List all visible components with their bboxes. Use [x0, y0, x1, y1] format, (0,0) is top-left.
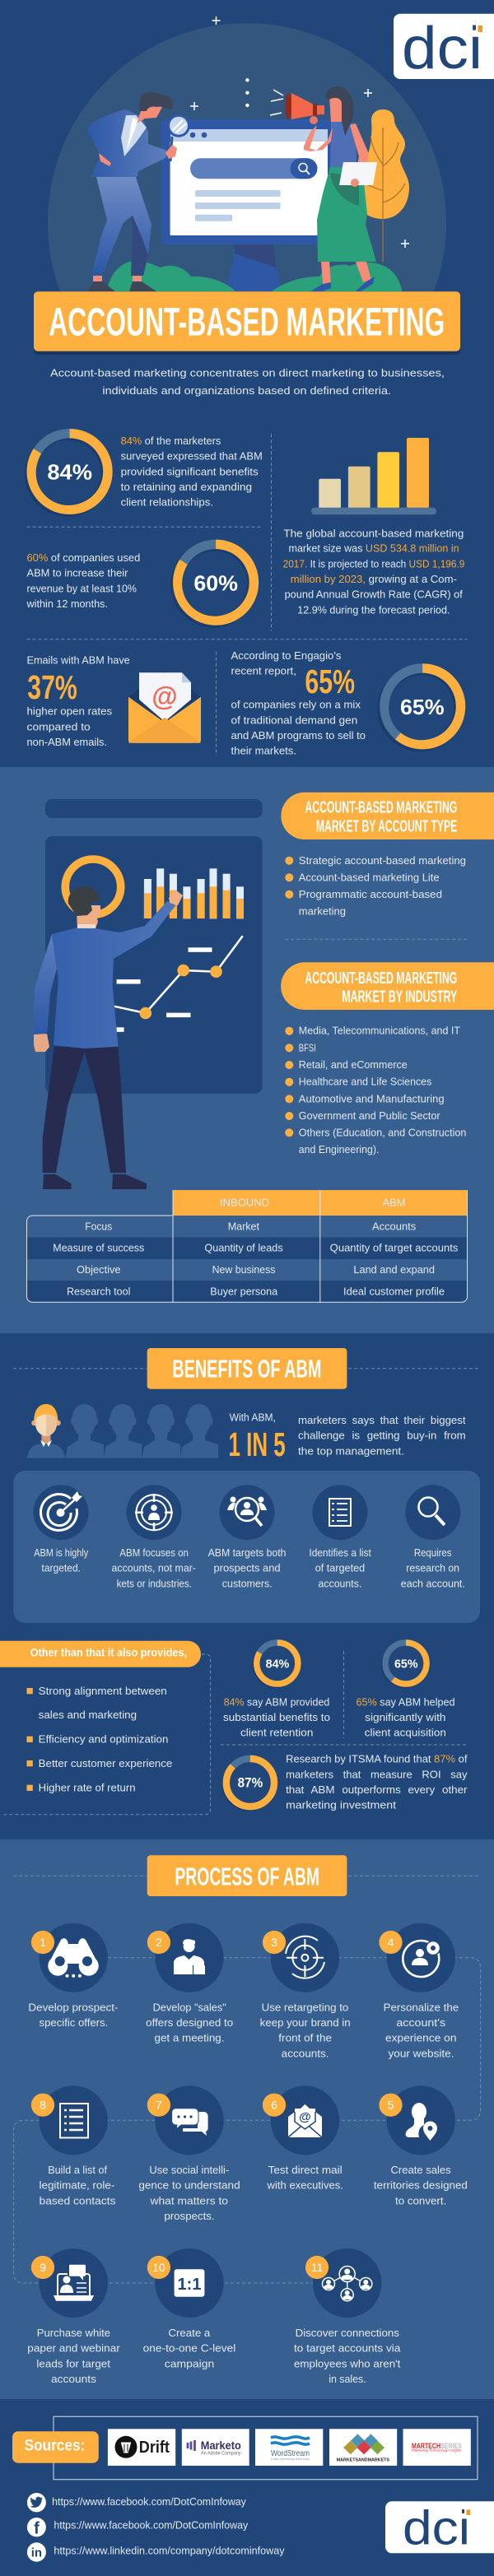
section background: market — [0, 767, 494, 1333]
step 2: Develop "sales" — [153, 2001, 226, 2013]
step 4: account's — [396, 2016, 446, 2029]
panel: sources — [12, 2416, 478, 2480]
benefit: research: Requires — [414, 1546, 452, 1559]
text: Engagio 65%: their markets. — [231, 745, 296, 757]
step 3: accounts. — [282, 2047, 329, 2059]
text: market size: market size was USD 534.8 million in — [288, 542, 459, 555]
bushes — [107, 261, 402, 291]
man pointing at board — [34, 886, 183, 1189]
section background: process — [0, 1839, 494, 2399]
social: facebook — [27, 2518, 249, 2538]
step 9: accounts — [51, 2373, 97, 2385]
list: industries: Government and Public Sector — [299, 1109, 440, 1122]
list: industries: Media, Telecommunications, and IT — [299, 1025, 460, 1037]
logo: MarTech Series: MARTECHSERIES — [412, 2442, 462, 2450]
step 2 — [146, 1923, 233, 2044]
hero illustration — [48, 16, 446, 291]
sources tag — [12, 2431, 99, 2463]
highlighted person — [31, 1404, 61, 1447]
text: 60% of companies — [26, 551, 140, 610]
donut: small 65%: 65% — [394, 1657, 418, 1671]
donut: 65% — [377, 666, 463, 751]
step 1: specific offers. — [40, 2016, 108, 2029]
callout: other than that: Other than that it also provides, — [30, 1646, 187, 1659]
step 7: gence to understand — [138, 2179, 240, 2192]
table rows: Focus — [85, 1220, 113, 1232]
title banner — [34, 291, 460, 355]
benefit: list: of targeted — [315, 1562, 365, 1574]
board ring — [65, 859, 121, 914]
benefit: highly targeted: targeted. — [41, 1562, 81, 1574]
text: ITSMA research — [286, 1753, 468, 1811]
list: industries: BFSI — [299, 1041, 316, 1053]
step 6: Test direct mail — [268, 2164, 343, 2176]
text: 65% client acquisition: significantly with — [365, 1711, 446, 1723]
step 3: Use retargeting to — [262, 2001, 348, 2013]
list: account types: Strategic account-based marketing — [299, 854, 466, 867]
intro text: individuals and organizations based on defined criteria. — [102, 384, 391, 397]
text: market size: 12.9% during the forecast period. — [297, 603, 450, 616]
heading: benefits of ABM: BENEFITS OF ABM — [172, 1354, 321, 1383]
donut: 84% — [25, 431, 110, 517]
step 5: 5 — [388, 2099, 394, 2112]
text: market size: pound Annual Growth Rate (CAGR) of — [285, 588, 463, 601]
logo: WordStream: Online Advertising Made Easy — [271, 2457, 310, 2461]
text: Engagio 65%: of traditional demand gen — [231, 714, 357, 726]
text: 65% client acquisition — [356, 1695, 455, 1739]
list: also provides: sales and marketing — [39, 1709, 137, 1721]
list: account types: marketing — [299, 905, 346, 918]
step 10: one-to-one C-level — [143, 2342, 235, 2355]
donut: small 84% — [253, 1641, 300, 1688]
step 11 — [294, 2248, 401, 2385]
logo: Drift — [108, 2429, 175, 2466]
table rows: Land and expand — [353, 1263, 435, 1276]
text: 84% client retention — [223, 1695, 330, 1739]
text: 84% of marketers: 84% of the marketers — [121, 435, 221, 447]
step 11: 11 — [311, 2261, 323, 2274]
step 11: in sales. — [329, 2373, 366, 2385]
step 1: 1 — [40, 1936, 46, 1949]
step 11: employees who aren't — [294, 2357, 401, 2369]
benefit: accounts: accounts, not mar- — [112, 1562, 196, 1574]
logo: WordStream: WordStream — [271, 2448, 310, 2458]
benefit: research: research on — [406, 1562, 459, 1574]
callout: other than that — [0, 1641, 201, 1667]
social: facebook: f — [34, 2520, 40, 2538]
text: 65% client acquisition: 65% say ABM helped — [356, 1695, 455, 1708]
table rows: New business — [212, 1263, 276, 1276]
table rows: Accounts — [372, 1220, 417, 1232]
step 4: your website. — [389, 2047, 454, 2059]
text: market size: 2017. It is projected to reach USD 1,196.9 — [283, 557, 464, 570]
social: twitter: https://www.facebook.com/DotComInfoway — [52, 2495, 246, 2508]
benefit: highly targeted — [33, 1485, 89, 1574]
logo: MarTech Series — [403, 2429, 471, 2466]
ribbon: by industry — [281, 962, 494, 1010]
benefit: list: accounts. — [318, 1577, 361, 1589]
text: 84% of marketers: surveyed expressed that ABM — [121, 450, 263, 463]
step 2: get a meeting. — [155, 2032, 224, 2044]
step 10: Create a — [168, 2327, 211, 2339]
step 9: Purchase white — [37, 2327, 110, 2339]
benefit: research — [401, 1485, 465, 1589]
donut: 84%: 84% — [47, 460, 92, 485]
social: twitter — [27, 2493, 246, 2512]
table rows: Quantity of leads — [204, 1242, 283, 1254]
step 5: Create sales — [390, 2164, 451, 2176]
step 8: based contacts — [40, 2194, 116, 2206]
text: Engagio 65%: 65% — [305, 663, 355, 700]
list: account types: Account-based marketing Lite — [299, 872, 440, 884]
step 10 — [143, 2248, 235, 2369]
intro text: Account-based marketing concentrates on direct marketing to businesses, — [50, 367, 445, 379]
logo: Drift: Drift — [139, 2439, 170, 2457]
intro text — [50, 367, 445, 397]
table rows: Ideal customer profile — [343, 1285, 445, 1297]
social: linkedin: https://www.linkedin.com/company/dotcominfoway — [54, 2544, 285, 2556]
step 10: 10 — [152, 2261, 165, 2274]
text: emails 37%: higher open rates — [26, 705, 113, 718]
text: 84% client retention: client retention — [240, 1727, 313, 1739]
stat: 1 in 5: challenge is getting buy-in from — [298, 1430, 466, 1442]
step 9: paper and webinar — [27, 2342, 120, 2355]
step 9 — [27, 2248, 120, 2385]
table rows: Market — [228, 1220, 259, 1232]
logo: dci bottom: dci — [403, 2502, 470, 2555]
step 2: 2 — [156, 1936, 162, 1949]
step 4: experience on — [385, 2032, 456, 2044]
man with magnifier — [86, 91, 190, 291]
section background: footer — [0, 2399, 494, 2576]
text: 84% of marketers: provided significant benefits — [121, 465, 259, 477]
step 8: Build a list of — [48, 2164, 107, 2176]
step 1: Develop prospect- — [28, 2001, 119, 2013]
logo: dci top: dci — [402, 16, 482, 81]
step 4: 4 — [388, 1936, 394, 1949]
icon: envelope: @ — [151, 681, 178, 711]
icon: envelope — [128, 671, 201, 743]
donut: small 84%: 84% — [266, 1657, 289, 1671]
process connector — [13, 1958, 481, 2283]
text: 84% of marketers: to retaining and expanding — [121, 481, 252, 493]
list: also provides: Strong alignment between — [39, 1685, 167, 1697]
monitor stand — [226, 244, 282, 291]
icon row: 1 in 5 people — [26, 1404, 218, 1458]
stat: 1 in 5: marketers says that their biggest — [298, 1414, 466, 1426]
benefit: prospects: prospects and — [214, 1562, 281, 1574]
step 6 — [263, 2085, 343, 2192]
text: market size: million by 2023, growing at a Com- — [291, 573, 457, 585]
social: facebook: https://www.facebook.com/DotComInfoway — [54, 2519, 249, 2532]
list: also provides: Efficiency and optimization — [39, 1733, 168, 1746]
stat: 1 in 5: the top management. — [298, 1444, 404, 1457]
board bars — [144, 868, 244, 918]
text: ITSMA research: marketing investment — [286, 1799, 396, 1811]
step 8: 8 — [40, 2099, 46, 2112]
list: industries: Retail, and eCommerce — [299, 1058, 408, 1071]
benefit: research: each account. — [401, 1577, 465, 1589]
stat: 1 in 5 — [229, 1411, 466, 1463]
table header: INBOUND — [220, 1197, 269, 1209]
benefit: list — [309, 1485, 371, 1589]
ribbon: by account type — [281, 793, 494, 839]
table rows: Research tool — [67, 1285, 130, 1297]
step 8 — [31, 2085, 116, 2206]
benefit: accounts — [112, 1485, 196, 1589]
text: ITSMA research: marketers that measure ROI say — [286, 1768, 468, 1780]
step 7: 7 — [156, 2099, 162, 2112]
text: Engagio 65% — [231, 649, 366, 757]
step 8: legitimate, role- — [40, 2179, 114, 2192]
table rows: Objective — [77, 1263, 121, 1276]
step 11: to target accounts via — [294, 2342, 401, 2355]
panel: benefit icons — [13, 1471, 480, 1623]
logo: MarketsAndMarkets: MARKETSANDMARKETS — [337, 2457, 389, 2462]
text: emails 37%: 37% — [27, 668, 77, 706]
list: also provides — [26, 1685, 172, 1794]
logo: dci bottom — [385, 2501, 494, 2555]
social: linkedin — [27, 2542, 285, 2562]
heading: process of ABM — [147, 1855, 347, 1896]
benefit: prospects: customers. — [222, 1577, 273, 1589]
step 3: 3 — [271, 1936, 277, 1949]
text: emails 37%: compared to — [26, 720, 91, 732]
heading: process of ABM: PROCESS OF ABM — [175, 1862, 319, 1891]
step 6: @ — [299, 2110, 311, 2124]
heading: benefits of ABM — [147, 1348, 347, 1389]
section background: intro — [0, 0, 494, 767]
panel: chart board — [45, 799, 263, 1094]
donut: small 65% — [381, 1641, 428, 1688]
step 4 — [379, 1923, 459, 2059]
stat: 1 in 5: With ABM, — [230, 1411, 276, 1423]
text: market size: The global account-based marketing — [283, 527, 464, 539]
table rows: Buyer persona — [210, 1285, 278, 1297]
text: market size — [283, 527, 464, 616]
text: 60% of companies: 60% of companies used — [26, 551, 140, 564]
step 6: 6 — [271, 2099, 277, 2112]
list: also provides: Better customer experience — [39, 1757, 172, 1769]
table rows: Measure of success — [53, 1242, 145, 1254]
step 7 — [138, 2085, 240, 2222]
browser window — [161, 119, 334, 244]
list: industries: Healthcare and Life Sciences — [299, 1076, 432, 1088]
text: ITSMA research: Research by ITSMA found that 87% of — [286, 1753, 468, 1765]
step 3: keep your brand in — [260, 2016, 351, 2029]
step 7: Use social intelli- — [149, 2164, 229, 2176]
section background: benefits — [0, 1333, 494, 1839]
step 9: 9 — [40, 2261, 46, 2274]
logo: MarketsAndMarkets — [329, 2429, 397, 2466]
step 9: leads for target — [36, 2357, 110, 2369]
benefit: accounts: ABM focuses on — [119, 1546, 189, 1559]
comparison table — [26, 1190, 468, 1302]
list: also provides: Higher rate of return — [39, 1782, 136, 1794]
text: 84% of marketers: client relationships. — [121, 496, 213, 509]
text: 84% client retention: substantial benefits to — [223, 1711, 330, 1723]
board line chart — [114, 936, 243, 1032]
text: 60% of companies: ABM to increase their — [26, 567, 128, 579]
step 6: with executives. — [266, 2179, 343, 2192]
bar chart — [311, 438, 436, 514]
text: emails 37%: Emails with ABM have — [26, 654, 130, 667]
social: linkedin: in — [31, 2546, 42, 2560]
step 5: territories designed — [374, 2179, 468, 2192]
text: Engagio 65%: According to Engagio's — [231, 649, 342, 662]
table rows — [53, 1220, 459, 1297]
tree — [359, 109, 409, 262]
logo: Marketo: An Adobe Company — [201, 2451, 240, 2456]
list: account types — [285, 854, 466, 918]
table header: ABM — [383, 1197, 405, 1209]
step 10: campaign — [165, 2357, 214, 2369]
list: industries: Automotive and Manufacturing — [299, 1092, 445, 1104]
donut: 60% — [170, 542, 256, 628]
text: Engagio 65%: of companies rely on a mix — [231, 699, 361, 711]
donut: 87% — [221, 1756, 276, 1811]
logo: WordStream — [255, 2429, 323, 2466]
list: industries — [285, 1025, 466, 1155]
text: 65% client acquisition: client acquisition — [365, 1727, 446, 1739]
logo: Marketo: Marketo — [201, 2439, 241, 2452]
text: 84% of marketers — [121, 435, 263, 509]
text: 60% of companies: revenue by at least 10% — [26, 582, 137, 594]
table rows: Quantity of target accounts — [330, 1242, 459, 1254]
step 3 — [260, 1923, 351, 2059]
step 7: what matters to — [149, 2194, 228, 2206]
text: 84% client retention: 84% say ABM provided — [224, 1695, 329, 1708]
step 1 — [28, 1923, 119, 2029]
donut: 60%: 60% — [193, 570, 238, 595]
list: industries: and Engineering). — [299, 1143, 379, 1155]
text: Engagio 65%: recent report, — [231, 665, 296, 677]
text: ITSMA research: that ABM outperforms every other — [286, 1783, 468, 1796]
step 3: front of the — [278, 2032, 332, 2044]
step 4: Personalize the — [384, 2001, 459, 2013]
benefit: list: Identifies a list — [309, 1546, 371, 1559]
step 7: prospects. — [164, 2210, 215, 2222]
logo: Marketo — [182, 2429, 249, 2466]
stat: 1 in 5: 1 IN 5 — [229, 1425, 286, 1463]
benefit: highly targeted: ABM is highly — [34, 1546, 89, 1559]
benefit: prospects: ABM targets both — [208, 1546, 287, 1559]
logo: MarTech Series: Marketing Technology Insights — [412, 2449, 462, 2453]
step 2: offers designed to — [146, 2016, 233, 2029]
benefit: prospects — [208, 1485, 287, 1589]
donut: 65%: 65% — [400, 695, 445, 719]
step 5 — [374, 2085, 468, 2206]
text: 60% of companies: within 12 months. — [26, 598, 108, 610]
sources tag: Sources: — [25, 2437, 85, 2454]
step 5: to convert. — [395, 2194, 446, 2206]
text: Engagio 65%: and ABM programs to sell to — [231, 729, 366, 742]
list: industries: Others (Education, and Construction — [299, 1126, 466, 1138]
table header — [220, 1197, 405, 1209]
step 10: 1:1 — [178, 2276, 201, 2294]
text: emails 37% — [26, 654, 130, 748]
text: emails 37%: non-ABM emails. — [26, 736, 107, 748]
step 11: Discover connections — [296, 2327, 399, 2339]
benefit: accounts: kets or industries. — [117, 1577, 192, 1589]
list: account types: Programmatic account-based — [299, 888, 442, 900]
woman with megaphone — [270, 86, 377, 291]
donut: 87%: 87% — [238, 1775, 263, 1791]
